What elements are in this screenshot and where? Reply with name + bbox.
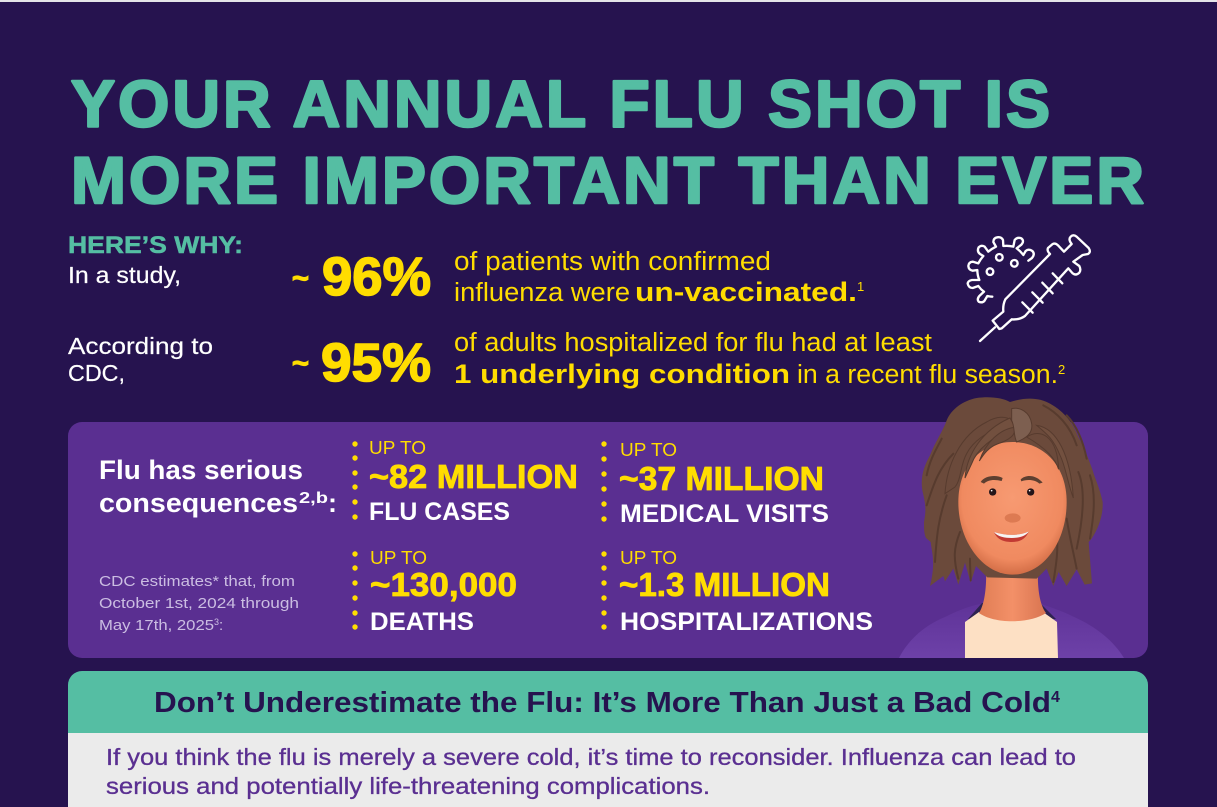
- panel heading: :: [328, 488, 337, 518]
- panel background: [68, 422, 1148, 658]
- stat: flu cases: [352, 437, 578, 526]
- hair strands: [927, 405, 1094, 582]
- label: according to CDC: According to: [68, 333, 213, 359]
- description: un-vaccinated: of patients with confirmed: [454, 248, 771, 276]
- description: underlying condition: in a recent flu season.: [797, 361, 1058, 389]
- description: underlying condition: [454, 329, 1065, 389]
- description: un-vaccinated: un-vaccinated.: [635, 277, 857, 307]
- description: underlying condition: 2: [1058, 362, 1065, 377]
- title: MORE IMPORTANT THAN EVER: [71, 143, 1144, 217]
- CDC estimates note: CDC estimates* that, from: [99, 573, 295, 590]
- body background: [68, 733, 1148, 807]
- banner background: [68, 671, 1148, 733]
- description: underlying condition: of adults hospitalized for flu had at least: [454, 329, 932, 357]
- face: [958, 442, 1067, 575]
- body text: [106, 744, 1076, 799]
- title: YOUR ANNUAL FLU SHOT IS: [71, 66, 1050, 140]
- label: in a study: In a study,: [68, 262, 181, 288]
- CDC estimates note: [99, 573, 299, 634]
- stat: deaths: UP TO: [370, 547, 427, 568]
- CDC estimates note: October 1st, 2024 through: [99, 595, 299, 612]
- stat: medical visits: ~37 MILLION: [619, 460, 824, 497]
- eyebrows: [981, 476, 1043, 484]
- value: 95 percent: 95%: [321, 333, 431, 393]
- stat: medical visits: MEDICAL VISITS: [620, 500, 829, 528]
- description: un-vaccinated: influenza were: [454, 279, 630, 307]
- fringe locks: [945, 408, 1073, 498]
- eyes: [989, 488, 1034, 496]
- hair silhouette: [922, 397, 1103, 586]
- stat: flu cases: FLU CASES: [369, 498, 510, 526]
- syringe: [980, 235, 1090, 341]
- value: 95 percent: ~: [292, 348, 309, 380]
- CDC estimates note: 3: [214, 617, 219, 627]
- panel heading: consequences: [99, 488, 298, 518]
- virus: [968, 237, 1034, 302]
- top edge strip: [0, 0, 1217, 2]
- body text: If you think the flu is merely a severe cold, it’s time to reconsider. Influenza can lead to: [106, 744, 1076, 770]
- panel heading: 2,b: [299, 490, 328, 507]
- panel heading: Flu has serious: [99, 455, 303, 485]
- stat: medical visits: [601, 439, 829, 528]
- label: according to CDC: [68, 333, 213, 386]
- stat: deaths: ~130,000: [370, 566, 517, 603]
- head and hair: [922, 397, 1103, 586]
- stat: hospitalizations: HOSPITALIZATIONS: [620, 608, 873, 636]
- stat: deaths: [352, 547, 517, 636]
- banner heading: Don’t Underestimate the Flu: It’s More Than Just a Bad Cold: [154, 687, 1051, 719]
- shirt: [965, 612, 1058, 658]
- icon: virus and syringe: [968, 235, 1090, 341]
- stat: medical visits: UP TO: [620, 439, 677, 460]
- statistic row: 96 percent: [68, 247, 864, 307]
- collar shadow: [968, 603, 1056, 619]
- stat: hospitalizations: UP TO: [620, 547, 677, 568]
- illustration: smiling woman: [899, 397, 1124, 658]
- value: 96 percent: 96%: [322, 247, 431, 307]
- description: un-vaccinated: [454, 248, 864, 307]
- panel: don't underestimate the flu: [68, 671, 1148, 807]
- label: according to CDC: CDC,: [68, 360, 125, 386]
- stat: flu cases: ~82 MILLION: [369, 458, 578, 495]
- stat: hospitalizations: [601, 547, 873, 636]
- title: [71, 66, 1144, 217]
- mouth: [994, 531, 1029, 542]
- description: un-vaccinated: 1: [857, 279, 864, 294]
- nose: [1005, 513, 1021, 523]
- CDC estimates note: :: [219, 617, 223, 634]
- statistic row: 95 percent: [68, 329, 1065, 393]
- stat: hospitalizations: ~1.3 MILLION: [619, 566, 830, 603]
- body text: serious and potentially life-threatening complications.: [106, 773, 710, 799]
- stat: flu cases: UP TO: [369, 437, 426, 458]
- subheading: here's why: HERE’S WHY:: [68, 232, 243, 259]
- panel heading: [99, 455, 337, 518]
- CDC estimates note: May 17th, 2025: [99, 617, 214, 634]
- panel: flu consequences: [68, 422, 1148, 658]
- jacket: [899, 603, 1124, 658]
- description: underlying condition: 1 underlying condition: [454, 359, 790, 389]
- value: 96 percent: ~: [292, 263, 309, 295]
- banner heading: 4: [1051, 689, 1060, 706]
- neck: [979, 565, 1046, 621]
- stat: deaths: DEATHS: [370, 608, 474, 636]
